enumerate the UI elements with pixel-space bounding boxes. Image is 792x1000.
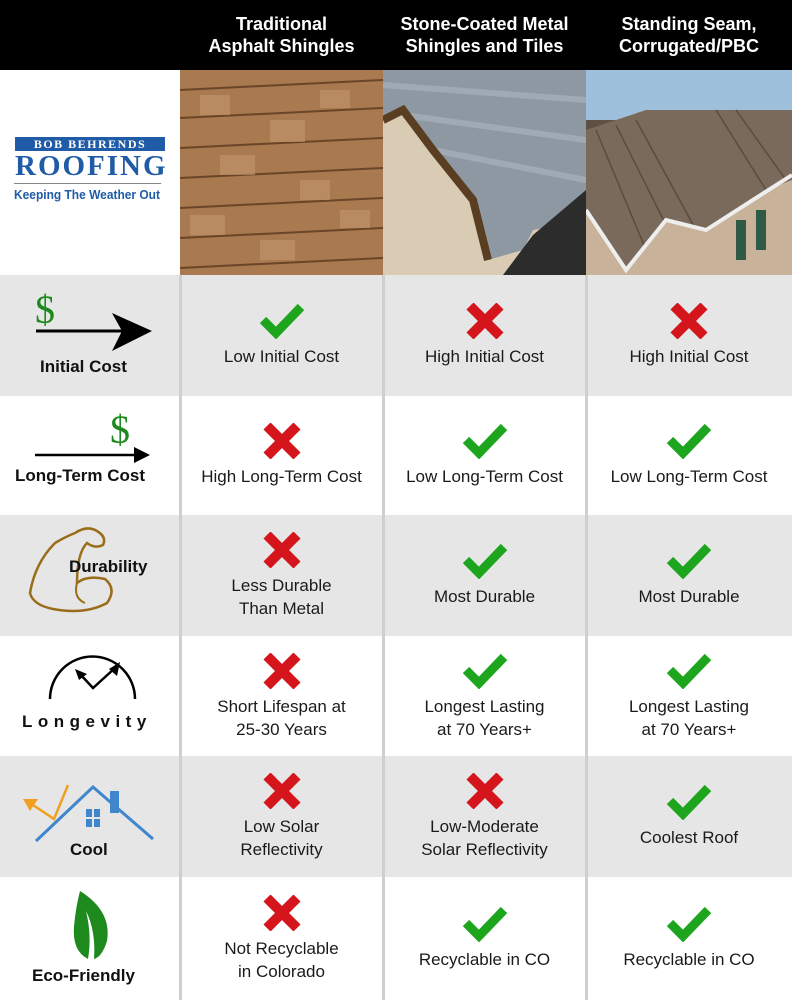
row: initial cost: [0, 275, 792, 396]
cell: Recyclable in CO: [419, 950, 550, 969]
header: empty corner: [0, 0, 180, 70]
cell: [231, 532, 332, 618]
cell: Longest Lasting: [629, 696, 749, 716]
icon: dollar arrow: [35, 289, 152, 351]
logo: tagline: Keeping The Weather Out: [14, 187, 160, 202]
cell: Low-Moderate: [430, 816, 539, 836]
cell: 25-30 Years: [236, 720, 327, 738]
header: asphalt shingles: Traditional: [236, 14, 327, 34]
label: cool: Cool: [70, 840, 108, 859]
logo: roofing: ROOFING: [15, 150, 168, 182]
icon: arrow dollar: [35, 407, 150, 463]
icon: house with sun reflection: [23, 784, 154, 842]
cell: [434, 544, 535, 606]
photo: standing seam: [586, 70, 792, 275]
cell: Low Solar: [244, 816, 319, 836]
cell: Coolest Roof: [640, 828, 738, 847]
cell: Less Durable: [231, 576, 332, 594]
cell: [201, 423, 362, 486]
row: eco-friendly: [32, 891, 755, 985]
cell: [224, 304, 339, 366]
cell: Recyclable in CO: [623, 950, 755, 969]
cell: Short Lifespan at: [217, 696, 346, 716]
cell: Reflectivity: [240, 840, 323, 858]
cell: Solar Reflectivity: [421, 840, 548, 858]
row: cool: [0, 756, 792, 877]
cell: High Long-Term Cost: [201, 467, 362, 486]
cell: [421, 773, 548, 858]
logo panel: [0, 70, 180, 275]
icon: leaf: [74, 891, 108, 959]
photo: stone-coated metal: [383, 70, 586, 275]
header: standing seam: Standing Seam,: [621, 14, 756, 34]
label: eco-friendly: Eco-Friendly: [32, 966, 135, 985]
cell: [629, 303, 749, 366]
row: durability: [0, 515, 792, 636]
cell: [424, 654, 545, 738]
cell: at 70 Years+: [437, 720, 532, 738]
cell: [240, 773, 323, 858]
header: standing seam: Corrugated/PBC: [619, 36, 759, 56]
label: durability: Durability: [69, 557, 147, 576]
header: asphalt shingles: Asphalt Shingles: [208, 36, 355, 56]
cell: Low Long-Term Cost: [611, 467, 767, 486]
cell: Longest Lasting: [424, 696, 545, 716]
logo: bob behrends: BOB BEHRENDS: [34, 137, 146, 151]
photo: asphalt shingles: [180, 70, 383, 275]
cell: [224, 895, 339, 980]
row: longevity: [22, 653, 749, 738]
cell: Not Recyclable: [224, 938, 339, 958]
cell: [638, 544, 740, 606]
label: longevity: Longevity: [22, 712, 152, 731]
header: stone-coated metal: Shingles and Tiles: [406, 36, 563, 56]
header: stone-coated metal: [383, 0, 586, 70]
icon: arrow dollar: $: [110, 407, 130, 452]
cell: Most Durable: [638, 587, 740, 606]
row: long-term cost: [15, 407, 768, 486]
cell: Low Long-Term Cost: [406, 467, 563, 486]
label: long-term cost: Long-Term Cost: [15, 466, 145, 485]
cell: Most Durable: [434, 587, 535, 606]
icon: gauge: [48, 655, 136, 699]
cell: High Initial Cost: [629, 347, 749, 366]
cell: Low Initial Cost: [224, 347, 339, 366]
header: stone-coated metal: Stone-Coated Metal: [400, 14, 568, 34]
cell: [425, 303, 544, 366]
cell: [419, 906, 550, 969]
label: initial cost: Initial Cost: [40, 357, 127, 376]
header: standing seam: [586, 0, 792, 70]
header: asphalt shingles: [180, 0, 383, 70]
icon: flexed arm: [28, 527, 113, 612]
cell: [629, 654, 749, 738]
cell: at 70 Years+: [641, 720, 736, 738]
cell: Than Metal: [239, 598, 324, 618]
cell: [217, 653, 346, 738]
cell: High Initial Cost: [425, 347, 544, 366]
cell: [611, 424, 768, 486]
cell: [640, 784, 738, 847]
cell: [623, 906, 755, 969]
cell: [406, 424, 563, 486]
cell: in Colorado: [238, 962, 325, 980]
